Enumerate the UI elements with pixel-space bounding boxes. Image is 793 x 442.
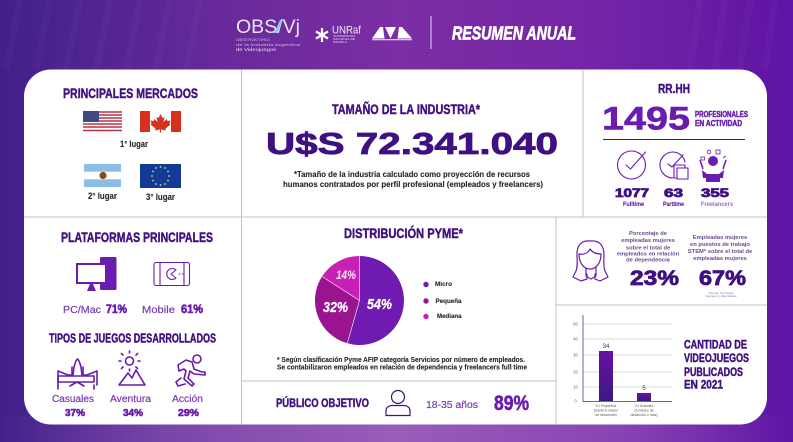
label: age range: 18-35 años — [426, 400, 478, 411]
text: empleadas STEM: Empleadas mujeres — [693, 235, 747, 241]
label: profesionales — [695, 110, 749, 128]
panel: plataformas principales — [49, 229, 216, 419]
label: profesionales: PROFESIONALES — [695, 110, 749, 119]
text: porcentaje empleadas: Porcentaje de — [629, 231, 668, 237]
legend: Pequeña — [436, 298, 462, 305]
panel: mujeres — [573, 231, 753, 298]
stat: fulltime: 1077 — [615, 186, 649, 200]
stat: freelancers — [701, 186, 734, 208]
logo: UNRaf: UNRaf — [332, 24, 362, 36]
panel: publico objetivo — [276, 390, 529, 416]
bar chart: 30 — [573, 352, 578, 358]
title: Resumen Anual: RESUMEN ANUAL — [452, 22, 576, 44]
icon: parttime — [660, 152, 688, 179]
bar chart: de desarrollo) — [595, 413, 617, 417]
label: PC/Mac: PC/Mac — [63, 304, 101, 316]
stat: parttime: 63 — [664, 186, 683, 200]
heading: PÚBLICO OBJETIVO — [276, 395, 369, 410]
stat: fulltime — [615, 186, 649, 208]
flag: USA — [83, 111, 122, 132]
bar chart: 5 — [642, 386, 646, 392]
text: porcentaje empleadas — [617, 231, 680, 264]
bar chart: 20 — [573, 370, 578, 374]
label: Mobile: 61% — [181, 302, 203, 316]
icon: aventura — [119, 351, 145, 385]
legend: Mediana — [437, 313, 462, 320]
text: porcentaje empleadas: empleados en relación — [617, 252, 680, 258]
label: PC/Mac — [63, 302, 127, 316]
footnote — [283, 170, 543, 189]
label: accion — [172, 394, 203, 419]
label: aventura — [110, 394, 151, 419]
text: empleadas STEM: STEM* sobre el total de — [688, 249, 753, 255]
logo: UNRaf: NACIONAL DE — [333, 37, 355, 41]
icon: accion — [176, 355, 205, 386]
label: profesionales: EN ACTIVIDAD — [695, 119, 742, 128]
icon: mobile game — [154, 262, 190, 286]
footnote: STEM: Ingeniería y Matemáticas — [705, 294, 737, 298]
footnote: *Tamaño de la industria calculado como proyección de recursos — [294, 170, 531, 179]
logo: UNRaf: UNIVERSIDAD — [333, 34, 355, 38]
bar chart: VJ Grandes — [635, 404, 653, 408]
text: porcentaje empleadas: empleadas mujeres — [621, 238, 675, 244]
panel: tamano de la industria — [266, 102, 558, 189]
icon: woman — [573, 241, 608, 281]
text: porcentaje empleadas: sobre el total de — [626, 246, 671, 252]
logo: UNRaf — [316, 24, 362, 44]
heading: DISTRIBUCIÓN PYME* — [344, 224, 463, 241]
bar chart: 50 — [573, 322, 578, 326]
pie chart — [315, 256, 404, 345]
bar chart: (6 meses de — [634, 408, 654, 412]
icon: casuales — [58, 359, 97, 389]
bar chart: 40 — [573, 336, 578, 342]
big number 1495: 1495 — [602, 100, 690, 136]
label: Mobile: Mobile — [142, 304, 175, 316]
text: porcentaje empleadas: de dependencia — [626, 258, 671, 264]
heading: PRINCIPALES MERCADOS — [63, 85, 198, 101]
heading: tipos de juegos: TIPOS DE JUEGOS DESARROLLADOS — [49, 332, 216, 346]
label: accion: 29% — [178, 407, 200, 419]
logo: OBSAVj: OBSERVATORIO — [236, 38, 270, 42]
pie chart: 14% — [336, 268, 356, 282]
label: casuales — [52, 394, 94, 419]
white panel — [24, 70, 767, 424]
icon: freelancers — [700, 150, 726, 182]
heading: RR.HH — [658, 82, 690, 96]
icon: monitor and tablet — [77, 257, 116, 291]
bar chart: 10 — [573, 384, 578, 390]
label: casuales: 37% — [65, 407, 86, 419]
value: 89% — [494, 392, 529, 415]
panel: RR.HH — [602, 82, 749, 208]
footnote — [277, 357, 527, 372]
pie chart: 32% — [323, 299, 348, 316]
legend: Micro — [435, 281, 452, 288]
text: empleadas STEM: en puestos de trabajo — [690, 242, 750, 248]
stat: fulltime: Fulltime — [623, 202, 645, 208]
footnote: STEM: *Ciencia, Tecnología, — [708, 291, 734, 295]
label: aventura: Aventura — [110, 394, 151, 405]
label: Mobile — [142, 302, 203, 316]
stat: freelancers: 355 — [701, 186, 729, 200]
label: 3 lugar: 3° lugar — [146, 192, 175, 202]
footnote: humanos contratados por perfil profesional (empleados y freelancers) — [283, 180, 543, 189]
stat: 67%: 67% — [699, 267, 746, 290]
flag: EU — [140, 164, 181, 188]
panel: principales mercados — [63, 85, 198, 202]
footnote: Se contabilizaron empleados en relación de dependencia y freelancers full time — [277, 364, 527, 372]
flag: Canada — [140, 111, 181, 132]
stat: parttime — [663, 186, 685, 208]
stat: freelancers: Freelancers — [701, 202, 734, 208]
footnote: STEM — [705, 291, 737, 298]
heading: cantidad de videojuegos: CANTIDAD DE — [684, 340, 747, 352]
label: PC/Mac: 71% — [106, 302, 127, 316]
bar chart: 0 — [574, 398, 577, 404]
heading: cantidad de videojuegos — [684, 340, 749, 392]
panel: videojuegos publicados — [573, 315, 749, 417]
logo: OBSAVj: de la Industria Argentina — [236, 43, 301, 47]
icon: fulltime — [618, 151, 646, 179]
bar chart: desarrollo o más) — [630, 413, 658, 417]
panel: distribucion pyme — [277, 224, 527, 372]
logo: UNRaf: RAFAELA — [333, 40, 347, 44]
bar chart: 34 — [603, 344, 610, 350]
stat: 23%: 23% — [630, 267, 679, 290]
legend — [423, 281, 462, 320]
pie chart: 54% — [367, 296, 392, 313]
label: accion: Acción — [172, 394, 203, 405]
bar chart: (hasta 6 meses — [594, 408, 618, 412]
heading: cantidad de videojuegos: EN 2021 — [684, 380, 724, 392]
flag: Argentina — [84, 164, 121, 187]
footnote: * Según clasificación Pyme AFIP categoría Servicios por número de empleados. — [277, 357, 525, 364]
heading: cantidad de videojuegos: PUBLICADOS — [684, 367, 743, 379]
label: 2 lugar: 2° lugar — [88, 191, 117, 201]
bar chart: VJ Pequeños — [596, 404, 617, 408]
stat: parttime: Parttime — [663, 202, 685, 208]
heading: TAMAÑO DE LA INDUSTRIA* — [332, 102, 481, 117]
heading: cantidad de videojuegos: VIDEOJUEGOS — [684, 353, 749, 365]
label: casuales: Casuales — [52, 394, 94, 405]
header logos — [236, 16, 576, 52]
label: 1 lugar: 1° lugar — [120, 139, 148, 149]
logo: ADVA — [372, 27, 412, 40]
label: aventura: 34% — [123, 407, 144, 419]
big number: U$S 72.341.040 — [266, 127, 558, 161]
logo: OBSAVj: OBS/Vj — [236, 17, 300, 38]
text: empleadas STEM — [688, 235, 753, 262]
bar chart — [573, 315, 672, 417]
logo: OBSAVj — [236, 17, 301, 52]
logo: OBSAVj: de Videojuegos — [236, 47, 276, 52]
icon: person — [386, 390, 410, 416]
heading: PLATAFORMAS PRINCIPALES — [61, 229, 213, 245]
text: empleadas STEM: empleadas mujeres — [693, 256, 747, 262]
